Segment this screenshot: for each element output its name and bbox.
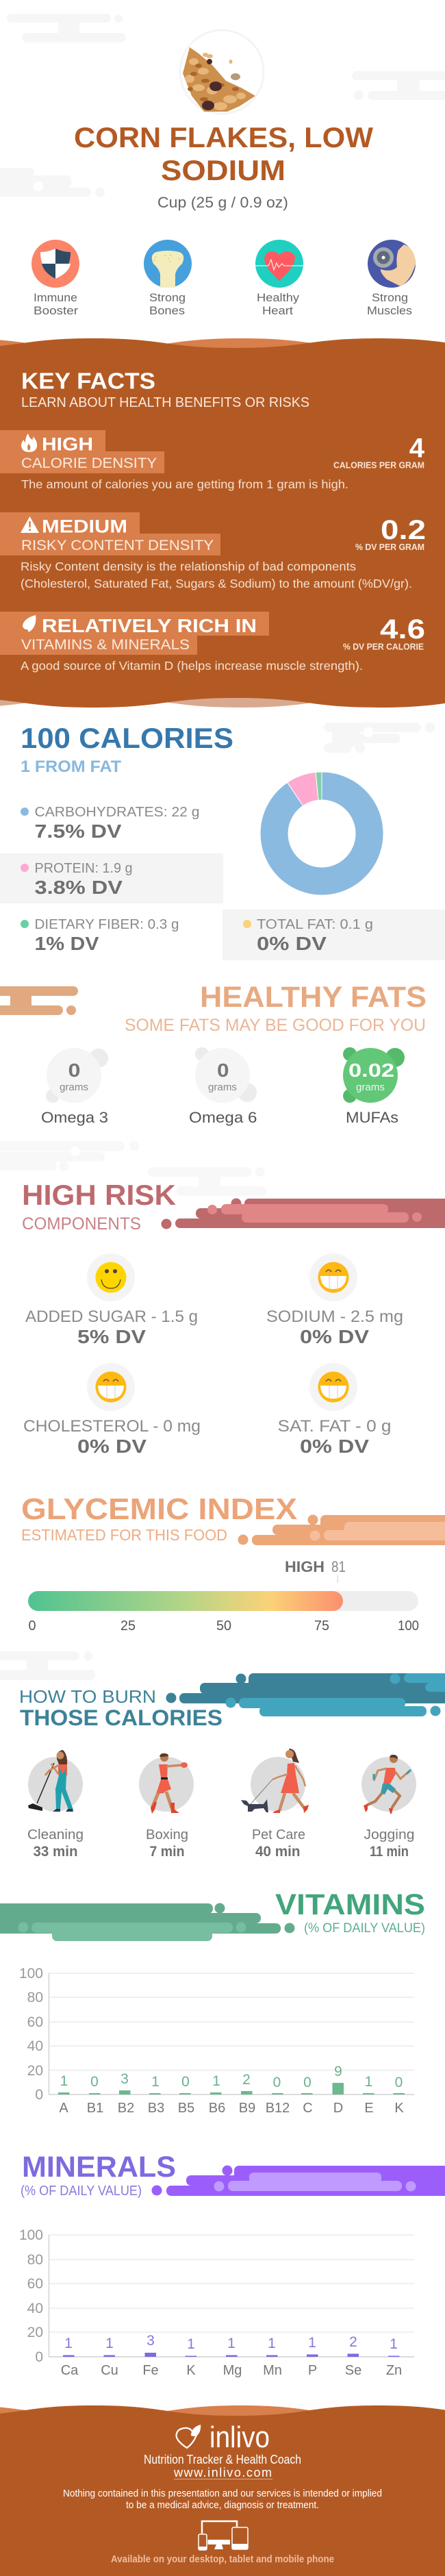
panel: minerals — [19, 2151, 445, 2378]
fact: rich in vitamins and minerals: % DV PER CALORIE — [343, 641, 424, 652]
bar chart: minerals: 3 — [147, 2333, 155, 2349]
bar chart: vitamins: 40 — [27, 2038, 43, 2054]
bar chart: minerals: 1 — [268, 2336, 276, 2351]
footer — [0, 2405, 445, 2576]
activity: pet care: 40 min — [255, 1844, 300, 1860]
bar chart: minerals: 1 — [308, 2335, 316, 2351]
icon: healthy heart: Heart — [262, 304, 293, 317]
tagline: Nutrition Tracker & Health Coach — [144, 2453, 301, 2466]
heading: high risk: COMPONENTS — [22, 1214, 141, 1234]
macro: dietary fiber: 1% DV — [34, 933, 99, 954]
fact: risky content density: Risky Content density is the relationship of bad components — [21, 560, 356, 573]
bar chart: minerals: Mg — [223, 2363, 242, 2378]
sodium: 0% DV — [300, 1326, 369, 1347]
fact: calorie density — [0, 430, 425, 491]
heading: glycemic index — [21, 1492, 297, 1544]
bar chart: minerals: 1 — [64, 2336, 73, 2351]
bar chart: vitamins: B1 — [87, 2101, 103, 2116]
saturated fat: SAT. FAT - 0 g — [278, 1417, 392, 1436]
cholesterol: CHOLESTEROL - 0 mg — [23, 1417, 201, 1436]
activity: pet care — [241, 1749, 309, 1860]
macro: total fat: TOTAL FAT: 0.1 g — [257, 917, 373, 932]
logo: inlivo: inlivo — [209, 2421, 270, 2454]
bar chart: vitamins: 0 — [35, 2087, 43, 2103]
decoration: minerals streak — [152, 2166, 445, 2196]
bar chart: vitamins: B3 — [148, 2101, 164, 2116]
bar chart: vitamins: B9 — [239, 2101, 255, 2116]
panel: high risk components — [0, 1141, 445, 1457]
activity: cleaning: 33 min — [33, 1844, 78, 1860]
availability note: Available on your desktop, tablet and mobile phone — [111, 2553, 334, 2565]
macro: protein: PROTEIN: 1.9 g — [34, 861, 133, 876]
fact: rich in vitamins and minerals — [0, 612, 425, 673]
mufas: grams — [356, 1081, 385, 1093]
icon: strong muscles: Strong — [372, 291, 408, 304]
icon: strong bones: Bones — [149, 304, 185, 317]
omega 3: 0 — [68, 1060, 81, 1081]
bar chart: vitamins: 80 — [27, 1990, 43, 2005]
omega 6: grams — [208, 1081, 237, 1093]
bar chart: minerals: Se — [345, 2363, 361, 2378]
disclaimer: Nothing contained in this presentation and our services is intended or implied — [63, 2488, 382, 2499]
icon: strong bones — [144, 240, 192, 317]
macro: carbohydrates — [21, 805, 200, 842]
heading: 100 calories — [21, 722, 233, 776]
bar chart: vitamins: B5 — [178, 2101, 194, 2116]
decoration: high risk streak — [162, 1199, 445, 1229]
mufas: 0.02 — [348, 1060, 394, 1081]
panel: glycemic index — [21, 1492, 445, 1634]
bar chart: vitamins: B12 — [266, 2101, 290, 2116]
heading: key facts — [21, 368, 309, 410]
activity: jogging: Jogging — [364, 1827, 415, 1842]
panel: 100 calories — [0, 722, 445, 960]
activity: pet care: Pet Care — [252, 1827, 305, 1842]
heading: vitamins: (% OF DAILY VALUE) — [304, 1921, 425, 1936]
gauge scale — [29, 1618, 419, 1634]
bar chart: minerals: Fe — [142, 2363, 159, 2378]
mufas: MUFAs — [346, 1109, 398, 1126]
bar chart: minerals: 1 — [105, 2336, 114, 2351]
title: CORN FLAKES, LOW — [74, 121, 373, 153]
mufas — [343, 1047, 405, 1126]
heading: glycemic index: ESTIMATED FOR THIS FOOD — [21, 1526, 227, 1544]
panel: vitamins — [0, 1888, 425, 2116]
bar chart: minerals: 80 — [27, 2252, 43, 2268]
icon: healthy heart: Healthy — [257, 291, 300, 304]
bar chart: vitamins: 0 — [90, 2074, 99, 2090]
fact: risky content density: 0.2 — [381, 515, 426, 545]
bar chart: vitamins: 0 — [303, 2075, 312, 2090]
macro: carbohydrates: CARBOHYDRATES: 22 g — [34, 805, 200, 820]
logo: inlivo — [177, 2421, 270, 2454]
bar chart: minerals: 60 — [27, 2276, 43, 2292]
bar chart: minerals: Cu — [101, 2363, 118, 2378]
saturated fat — [278, 1363, 392, 1457]
bar chart: minerals: Mn — [263, 2363, 282, 2378]
fact: calorie density: CALORIES PER GRAM — [333, 460, 424, 470]
saturated fat: 0% DV — [300, 1436, 369, 1457]
fact: calorie density: 4 — [409, 433, 425, 463]
activity: boxing: Boxing — [146, 1827, 188, 1842]
gauge scale: 50 — [216, 1618, 231, 1634]
bar chart: minerals — [19, 2227, 414, 2378]
bar chart: vitamins: 1 — [365, 2074, 372, 2090]
glycemic gauge bar — [28, 1591, 418, 1611]
activity: boxing — [139, 1753, 194, 1860]
heading: key facts: KEY FACTS — [21, 368, 155, 393]
panel: how to burn those calories — [0, 1651, 445, 1860]
fact: rich in vitamins and minerals: RELATIVELY RICH IN — [42, 615, 257, 636]
icon: healthy heart — [255, 240, 303, 317]
gauge scale: 0 — [29, 1618, 36, 1634]
title: SODIUM — [161, 154, 285, 186]
heading: glycemic index: GLYCEMIC INDEX — [21, 1492, 297, 1526]
bar chart: minerals: 1 — [227, 2336, 236, 2351]
disclaimer: to be a medical advice, diagnosis or treatment. — [126, 2499, 319, 2511]
bar chart: minerals: 1 — [187, 2336, 195, 2352]
heading: 100 calories: 1 FROM FAT — [21, 758, 121, 776]
gauge scale: 75 — [314, 1618, 329, 1634]
macro: total fat: 0% DV — [257, 933, 327, 954]
header section — [0, 14, 445, 317]
gauge value label: 81 — [331, 1558, 346, 1575]
fact: risky content density: MEDIUM — [42, 516, 127, 537]
heading: healthy fats — [125, 981, 427, 1035]
bar chart: minerals: 0 — [35, 2349, 43, 2365]
omega 6: Omega 6 — [189, 1109, 257, 1126]
gauge scale: 25 — [120, 1618, 136, 1634]
fact: calorie density: CALORIE DENSITY — [21, 455, 157, 471]
donut chart — [260, 772, 383, 895]
bar chart: vitamins: 1 — [212, 2073, 220, 2089]
bar chart: vitamins: D — [333, 2101, 343, 2116]
decoration: healthy fats streak — [0, 986, 78, 1015]
bar chart: minerals: 2 — [349, 2334, 357, 2350]
decoration: glycemic streak — [238, 1515, 445, 1545]
heading: high risk: HIGH RISK — [22, 1179, 176, 1211]
decoration: vitamins streak — [0, 1903, 294, 1941]
icon: strong muscles — [367, 240, 416, 317]
activity: jogging: 11 min — [370, 1844, 409, 1860]
heading: how to burn those calories: HOW TO BURN — [19, 1686, 156, 1707]
sodium: SODIUM - 2.5 mg — [266, 1308, 403, 1326]
decoration: burn streak — [166, 1673, 445, 1716]
bar chart: vitamins: B2 — [118, 2101, 134, 2116]
icon: strong bones: Strong — [149, 291, 186, 304]
macro: total fat — [222, 910, 445, 960]
bar chart: vitamins: B6 — [209, 2101, 225, 2116]
heading: 100 calories: 100 CALORIES — [21, 722, 233, 754]
added sugar: ADDED SUGAR - 1.5 g — [25, 1308, 198, 1326]
heading: healthy fats: HEALTHY FATS — [200, 981, 427, 1014]
omega 6: 0 — [217, 1060, 229, 1081]
macro: dietary fiber — [21, 917, 179, 954]
bar chart: vitamins: 0 — [273, 2075, 281, 2090]
bar chart: minerals: 100 — [19, 2227, 43, 2243]
macro: dietary fiber: DIETARY FIBER: 0.3 g — [34, 917, 179, 932]
sodium — [266, 1253, 403, 1347]
website link: www.inlivo.com — [173, 2466, 272, 2479]
icon: immune booster — [31, 240, 79, 317]
heading: minerals: MINERALS — [22, 2151, 176, 2184]
heading: minerals: (% OF DAILY VALUE) — [21, 2184, 142, 2199]
icon: immune booster: Booster — [34, 304, 78, 317]
bar chart: vitamins: 0 — [395, 2075, 403, 2090]
fact: risky content density — [0, 512, 426, 590]
fact: risky content density: % DV PER GRAM — [355, 542, 424, 552]
icon: strong muscles: Muscles — [367, 304, 412, 317]
gauge value label — [285, 1558, 346, 1583]
activity: cleaning — [27, 1750, 84, 1860]
icon: devices — [199, 2521, 248, 2550]
serving size: Cup (25 g / 0.9 oz) — [157, 194, 288, 211]
bar chart: minerals: P — [308, 2363, 317, 2378]
activity: boxing: 7 min — [149, 1844, 185, 1860]
omega 6 — [189, 1047, 257, 1126]
fact: rich in vitamins and minerals: A good source of Vitamin D (helps increase muscle strength). — [21, 659, 363, 673]
bar chart: vitamins: 2 — [242, 2072, 251, 2088]
macro: protein — [0, 853, 223, 903]
food photo: granola in circle — [180, 30, 264, 114]
bar chart: vitamins: C — [303, 2101, 313, 2116]
heading: vitamins: VITAMINS — [275, 1888, 425, 1921]
omega 3: grams — [60, 1081, 88, 1093]
fact: rich in vitamins and minerals: VITAMINS & MINERALS — [21, 637, 190, 653]
heading: high risk — [22, 1179, 176, 1234]
heading: minerals — [21, 2151, 176, 2199]
fact: rich in vitamins and minerals: 4.6 — [380, 614, 425, 645]
bar chart: minerals: Ca — [61, 2363, 79, 2378]
bar chart: vitamins: E — [364, 2101, 374, 2116]
heading: key facts: LEARN ABOUT HEALTH BENEFITS OR RISKS — [21, 395, 309, 410]
bar chart: vitamins: A — [59, 2101, 68, 2116]
heading: how to burn those calories: THOSE CALORIES — [20, 1705, 222, 1730]
bar chart: vitamins: 60 — [27, 2014, 43, 2030]
cholesterol: 0% DV — [77, 1436, 147, 1457]
icon: immune booster: Immune — [34, 291, 77, 304]
fact: calorie density: HIGH — [42, 434, 93, 455]
bar chart: vitamins: 3 — [120, 2071, 129, 2087]
omega 3 — [41, 1048, 108, 1126]
added sugar: 5% DV — [77, 1326, 146, 1347]
bar chart: vitamins: 20 — [27, 2063, 43, 2079]
heading: how to burn those calories — [19, 1686, 222, 1730]
heading: healthy fats: SOME FATS MAY BE GOOD FOR YOU — [125, 1016, 426, 1035]
fact: risky content density: RISKY CONTENT DENSITY — [21, 538, 214, 553]
omega 3: Omega 3 — [41, 1109, 108, 1126]
added sugar — [25, 1253, 198, 1347]
bar chart: vitamins: 9 — [334, 2064, 342, 2079]
bar chart: minerals: K — [186, 2363, 196, 2378]
bar chart: minerals: 1 — [390, 2336, 398, 2352]
panel: healthy fats — [0, 981, 427, 1126]
panel: key facts — [0, 338, 445, 708]
gauge value label: HIGH — [285, 1558, 325, 1575]
bar chart: vitamins: K — [394, 2101, 404, 2116]
gauge scale: 100 — [398, 1618, 419, 1634]
bar chart: vitamins: 100 — [19, 1966, 43, 1981]
fact: calorie density: The amount of calories you are getting from 1 gram is high. — [21, 477, 348, 491]
bar chart: vitamins — [19, 1966, 414, 2116]
title — [74, 121, 373, 186]
bar chart: vitamins: 1 — [151, 2074, 160, 2090]
bar chart: vitamins: 0 — [181, 2074, 190, 2090]
activity: cleaning: Cleaning — [27, 1827, 84, 1842]
fact: risky content density: (Cholesterol, Saturated Fat, Sugars & Sodium) to the amount (%DV/gr). — [21, 577, 412, 590]
bar chart: vitamins: 1 — [60, 2073, 68, 2089]
cholesterol — [23, 1363, 201, 1457]
bar chart: minerals: Zn — [386, 2363, 402, 2378]
bar chart: minerals: 20 — [27, 2325, 43, 2340]
activity: jogging — [361, 1755, 416, 1860]
macro: carbohydrates: 7.5% DV — [34, 821, 122, 842]
heading: vitamins — [275, 1888, 425, 1936]
bar chart: minerals: 40 — [27, 2301, 43, 2316]
disclaimer — [63, 2488, 382, 2511]
macro: protein: 3.8% DV — [34, 877, 123, 898]
